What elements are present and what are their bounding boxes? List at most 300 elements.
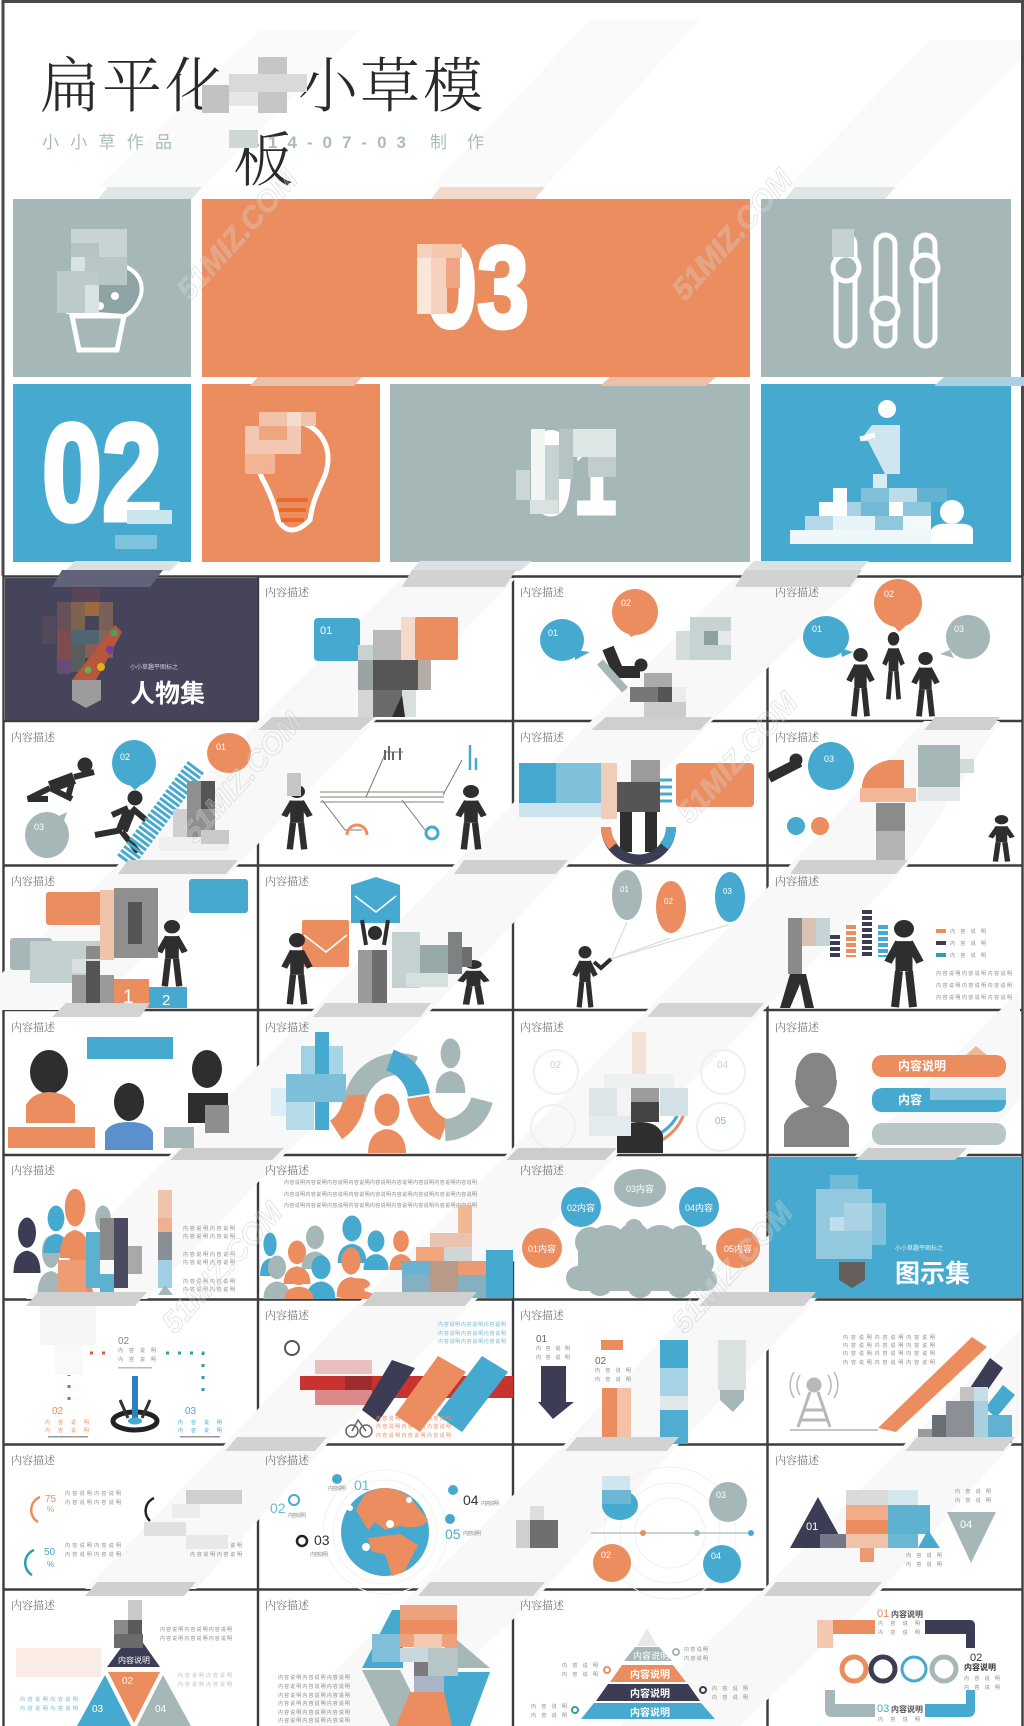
text lines [843,1334,935,1366]
orange card [676,763,754,807]
podium 2 [149,987,187,1009]
orange mosaic [846,1505,888,1562]
blue block [519,763,617,819]
level 2 orange: 内容说明 [630,1668,670,1681]
blue text lines: 内容说明内容说明内容说明 [438,1321,506,1328]
blue bubble: 03 [824,754,834,764]
slide: row 7 col 4: 内容描述 [775,1453,819,1467]
mosaic [40,1300,96,1375]
watermark text [156,162,805,1340]
card 02 [118,1336,156,1368]
timeline [591,1530,754,1536]
orange triangle [108,1672,160,1723]
grey triangle [137,1675,191,1726]
captions: 内容说明 [463,1530,481,1537]
blue bubble: 01 [548,628,558,638]
side labels [531,1646,748,1719]
card 02: 内容说明 [595,1367,631,1374]
slide: row 7 col 3 [516,1467,754,1599]
blue triangle: 03 [92,1704,104,1715]
podium 1 [111,979,149,1008]
mosaic over title plus sign [202,57,307,113]
orange pill [872,1055,1006,1077]
text lines: 内容说明 [906,1552,942,1559]
slide: row 4 col 2 [265,1020,482,1153]
arcs [336,1060,482,1130]
grey column arrow [718,1340,746,1412]
card blue 03: 03 [185,1406,197,1417]
man left mosaic [780,918,830,1008]
blue bubble: 04 [711,1551,721,1561]
dotted paths [69,1353,203,1400]
side labels: 内容说明 [562,1671,598,1678]
label 01: 内容说明 [878,1620,920,1627]
equalizer chart [835,910,883,957]
panel: bulb tile [202,384,380,562]
text lines [906,1488,991,1568]
grey mosaic bubble [676,617,731,660]
mosaic [144,1490,242,1549]
label 01: 内容说明 [891,1609,923,1619]
watermark text: 51MIZ.COM [171,162,305,307]
slide: row 3 col 2 [265,874,487,1006]
blue cloud [561,1187,601,1227]
title: 小 [298,54,359,120]
grey mosaic [918,745,974,801]
orange mosaic [860,760,916,802]
stripes [660,780,672,801]
watermark mosaic tabs on row lines [26,187,1024,1596]
mosaic peak [966,1046,987,1055]
slide: row 2 col 1: 内容描述 [11,730,55,744]
reaching man [991,815,1012,862]
card 02: 内容说明 [118,1347,156,1354]
labels: 03 [314,1532,330,1548]
card blue 03: 内容说明 [178,1419,222,1426]
label 03: 内容说明 [891,1704,923,1714]
pale numbers: 05 [715,1116,727,1127]
pyramid top [637,1628,657,1646]
orange bubble [593,1544,631,1582]
slide: diagrams cover [769,1157,1022,1298]
woman [26,1050,75,1123]
podium 1: 1 [123,987,134,1008]
side labels: 内容说明 [684,1655,708,1662]
orange text lines: 内容说明内容说明内容说明 [376,1423,451,1430]
bar chart [385,746,400,760]
card 02: 内容说明 [118,1356,156,1363]
text lines: 内容说明内容说明内容说明 [278,1700,350,1707]
text lines: 内容说明内容说明内容说明 [843,1350,935,1357]
slide: row 3 col 4 [775,874,1012,1008]
mosaic person [358,617,431,717]
slide: row 3 col 2: 内容描述 [265,874,309,888]
blue text lines: 内容说明内容说明内容说明 [438,1338,506,1345]
panel: cupcake tile [13,199,191,377]
text lines: 内容说明内容说明 [183,1225,235,1232]
subtitle: 小小草作品 [42,133,172,152]
blue text lines [438,1321,506,1345]
concentric rings [323,1470,447,1594]
blue top-left segment [362,1610,403,1668]
side labels: 内容说明 [712,1694,748,1701]
orange corner [817,1620,875,1648]
orange card [8,1127,95,1148]
captions: 内容说明 [310,1551,328,1558]
text lines: 内容说明内容说明内容说明 [278,1674,350,1681]
man right [888,920,920,1007]
slide: row 6 col 4 [790,1334,1015,1443]
side labels: 内容说明 [712,1685,748,1692]
blue corner [925,1690,975,1717]
captions [288,1485,499,1558]
subtitle: 制作 [430,133,484,152]
slide: row 3 col 1: 内容描述 [11,874,55,888]
center person [617,1122,663,1153]
orange cloud: 01内容 [528,1243,556,1254]
label 02: 02 [970,1652,982,1664]
text lines: 内容说明内容说明 [183,1251,235,1258]
text lines: 内容说明内容说明 [20,1696,78,1703]
card orange 02: 内容说明 [45,1427,89,1434]
orange bubble [874,579,922,632]
title: 草 [360,54,420,120]
small caption: 小小草趣平图标之 [130,663,178,671]
orange text lines: 内容说明内容说明内容说明 [376,1415,451,1422]
orange column [602,1388,631,1443]
blue bubble [803,616,853,658]
orange bubble: 02 [601,1550,611,1560]
text lines: 内容说明 [955,1497,991,1504]
blue pill [872,1088,1006,1112]
title: 模 [423,54,483,120]
blue mosaic [271,1032,346,1130]
card 02: 02 [595,1356,607,1367]
three standing people [849,632,937,716]
man left [284,933,310,1004]
blue text lines: 内容说明内容说明内容说明 [438,1330,506,1337]
text lines: 内容说明内容说明 [65,1490,121,1497]
mosaic [589,1032,688,1136]
man right [188,1050,229,1133]
mosaic [918,1387,1012,1443]
slide: row 1 col 3: 内容描述 [520,585,564,599]
slide: pyramid: 内容描述 [520,1598,564,1612]
text lines: 内容说明内容说明 [178,1672,232,1679]
number 03: 03 [425,222,529,352]
dark arrow [538,1366,574,1419]
slide: row 2 col 3 [519,730,754,860]
legend [936,928,986,959]
man middle [105,1083,153,1150]
card 01: 内容说明 [536,1345,570,1352]
orange text lines: 内容说明内容说明内容说明 [376,1432,451,1439]
slide: row 3 col 3 [575,870,745,1007]
text lines: 内容说明内容说明内容说明 [278,1683,350,1690]
ribbon icon [285,1341,299,1355]
level 1 grey: 内容说明 [633,1650,669,1661]
icon: sliders [832,229,938,346]
text lines: 内容说明内容说明 [190,1542,242,1549]
text lines: 内容说明内容说明内容说明 [278,1692,350,1699]
slide: row 8 col 4 [817,1608,1000,1723]
text lines: 内容说明内容说明内容说明 [936,970,1012,977]
title: 平 [102,54,162,120]
round icons [787,817,829,835]
orange woman [368,1094,406,1153]
panel: grey 01 tile [390,384,750,562]
gauge icons [347,825,438,839]
blue ribbon [985,1385,1015,1418]
cover heading: 人物集 [130,680,205,708]
orange bottom segment [396,1692,452,1726]
grey bubble: 03 [954,624,964,634]
grey segment [362,1670,428,1726]
card orange 02 [45,1406,89,1438]
card 01: 内容说明 [536,1354,570,1361]
text lines: 内容说明内容说明内容说明内容说明内容说明内容说明内容说明内容说明内容说明 [284,1191,477,1198]
slide: row 5 col 1 [11,1163,235,1300]
label 01: 内容说明 [878,1629,920,1636]
blue text card: 01 [320,625,332,637]
blue mosaic [888,1490,940,1548]
grey bottom band [820,1534,846,1548]
black gauge [146,1498,154,1521]
blue gauge: 50 [44,1547,56,1558]
orange text card [415,617,458,660]
crowd [260,1215,413,1299]
grey pill [872,1123,1006,1145]
subtitle: 14-07-03 [268,133,406,152]
mosaic dark [516,1506,558,1548]
level 4 blue: 内容说明 [630,1706,670,1719]
card orange 02: 02 [52,1406,64,1417]
blue column [660,1340,688,1444]
watermark text: 51MIZ.COM [156,1195,290,1340]
orange cloud [716,1228,760,1268]
slide: globe: 内容描述 [265,1453,309,1467]
mosaic over 0 [417,244,462,314]
person lying [600,648,647,690]
slide: row 1 col 2: 内容描述 [265,585,309,599]
text lines: 内容说明内容说明 [65,1542,121,1549]
slide: globe [265,1453,499,1594]
text lines: 内容说明内容说明 [65,1499,121,1506]
grey bubble [709,1482,747,1522]
icon circles [842,1657,956,1681]
small caption: 小小草趣平图标之 [895,1244,943,1252]
blue right segment [420,1672,490,1726]
card blue 03: 内容说明 [178,1427,222,1434]
slide: row 2 col 2 [284,745,484,849]
text lines: 内容说明内容说明 [178,1681,232,1688]
bicycle icon [346,1420,372,1437]
orange balloon: 02 [664,897,673,906]
slide: pyramid [520,1598,748,1719]
man center mosaic [358,920,388,1006]
text lines [936,970,1012,1001]
mosaic [58,1218,142,1298]
slide: row 4 col 1 [8,1020,229,1150]
orange card [46,892,106,925]
man right [460,960,487,1005]
number 02: 02 [42,396,162,550]
orange bubble [612,589,658,637]
blue bubble [540,619,590,661]
headset person [784,1052,849,1147]
text lines: 内容说明内容说明内容说明 [936,994,1012,1001]
blue bubble [703,1545,741,1583]
slide: row 1 col 4 [775,579,990,716]
card orange 02: 内容说明 [45,1419,89,1426]
mosaic dark [630,673,686,717]
mosaic dark person [617,760,660,852]
orange bubble: 01 [216,742,226,752]
grey bubble: 03 [34,822,44,832]
slide: row 5 col 2 [260,1163,513,1299]
side labels: 内容说明 [531,1712,567,1719]
text lines: 内容说明内容说明 [183,1286,235,1293]
watermark text: 51MIZ.COM [666,162,800,307]
navy triangle [107,1630,160,1667]
text lines: 内容说明内容说明 [183,1278,235,1285]
label 01 [877,1608,923,1636]
grey band [846,1490,888,1505]
label 02: 内容说明 [964,1662,996,1672]
donut [606,827,671,860]
panel: sliders tile [761,199,1011,377]
text lines: 内容说明 [906,1561,942,1568]
text lines [20,1626,232,1712]
text lines: 内容说明内容说明内容说明 [278,1709,350,1716]
side labels: 内容说明 [562,1662,598,1669]
blue bar chart [470,745,476,770]
captions: 内容说明 [328,1485,346,1492]
orange gauge: 75 [45,1494,57,1505]
blue balloon [715,872,745,922]
panel: big orange 03 tile [202,199,750,377]
grey bubble [940,615,990,659]
text lines: 内容说明内容说明 [183,1259,235,1266]
number 01: 01 [529,408,617,540]
slide: row 7 col 4 [775,1453,996,1568]
blue cloud: 04内容 [685,1202,713,1213]
labels [270,1477,479,1548]
slide: row 1 col 4: 内容描述 [775,585,819,599]
orange cloud: 05内容 [724,1243,752,1254]
blue balloon: 03 [723,887,732,896]
slide: row 5 col 2: 内容描述 [265,1163,309,1177]
man [575,946,611,1007]
pale circles [531,1050,745,1151]
card 01: 01 [536,1334,548,1345]
orange triangle: 02 [122,1676,134,1687]
blue cloud [679,1187,719,1227]
level 3 navy: 内容说明 [630,1687,670,1700]
orange mosaic [372,1605,458,1692]
blue bubble [112,740,156,790]
text lines: 内容说明内容说明内容说明 [843,1342,935,1349]
slide: row 8 col 1 [11,1598,232,1726]
label 03: 内容说明 [878,1716,920,1723]
text lines: 内容说明内容说明内容说明 [278,1717,350,1724]
orange gauge: % [47,1505,54,1514]
timeline lines [320,752,462,830]
label 02 [964,1652,1000,1691]
slide: row 5 col 3 [520,1163,760,1298]
labels: 01 [354,1477,370,1493]
slide: row 4 col 2: 内容描述 [265,1020,309,1034]
balloon strings [611,922,728,959]
title [40,54,483,194]
text lines: 内容说明内容说明 [20,1705,78,1712]
slide: row 3 col 1 [10,874,248,1009]
big grey cloud [566,1219,717,1298]
slide: row 6 col 2 [265,1308,513,1439]
panel: people pyramid tile [761,384,1011,562]
subtitle [42,133,484,152]
shadow line [790,1429,878,1431]
legend: 内容说明 [950,940,986,947]
watermark text: 51MIZ.COM [176,705,310,850]
globe [341,1488,429,1576]
slide: row 8 col 2 [265,1598,490,1726]
mosaic over 01 [516,429,616,514]
podium 2: 2 [162,992,170,1009]
text lines: 内容说明内容说明内容说明 [160,1626,232,1633]
grey top-right segment [445,1640,490,1668]
slide: row 2 col 4 [769,730,1012,863]
legend: 内容说明 [950,928,986,935]
crowd [14,1189,115,1300]
mosaic [10,888,158,1006]
icon: colorful bulb mosaic [42,588,122,708]
slide: row 6 col 3: 内容描述 [520,1308,564,1322]
grey triangle [947,1512,996,1563]
orange bubble: 02 [621,598,631,608]
mosaic [159,781,229,851]
mosaic over date [229,130,258,148]
title: 扁 [40,54,100,120]
text lines [284,1179,477,1209]
navy triangle [790,1497,846,1548]
pushing man [769,754,802,778]
crawling man [28,758,94,799]
mosaic top [114,1600,143,1648]
grey corner [825,1690,875,1717]
navy corner [925,1620,975,1648]
labels: 02 [270,1500,286,1516]
standing man [159,920,185,986]
pale numbers: 04 [717,1060,729,1071]
pale watermark bands over header [98,20,1024,187]
rings [604,1467,736,1599]
text lines [183,1225,235,1293]
slide: row 6 col 1 [40,1300,222,1438]
running man [95,791,146,852]
radio tower [790,1372,838,1427]
donut accents [606,827,671,846]
slide: row 2 col 4: 内容描述 [775,730,819,744]
grey balloon: 01 [620,885,629,894]
orange gauge [31,1494,57,1522]
pale watermark bands over thumbnails [0,578,1020,1726]
text lines: 内容说明内容说明 [183,1233,235,1240]
title: 化 [165,54,225,120]
grey mosaic [392,932,472,988]
grey triangle: 04 [155,1704,167,1715]
navy triangle: 01 [806,1521,818,1533]
